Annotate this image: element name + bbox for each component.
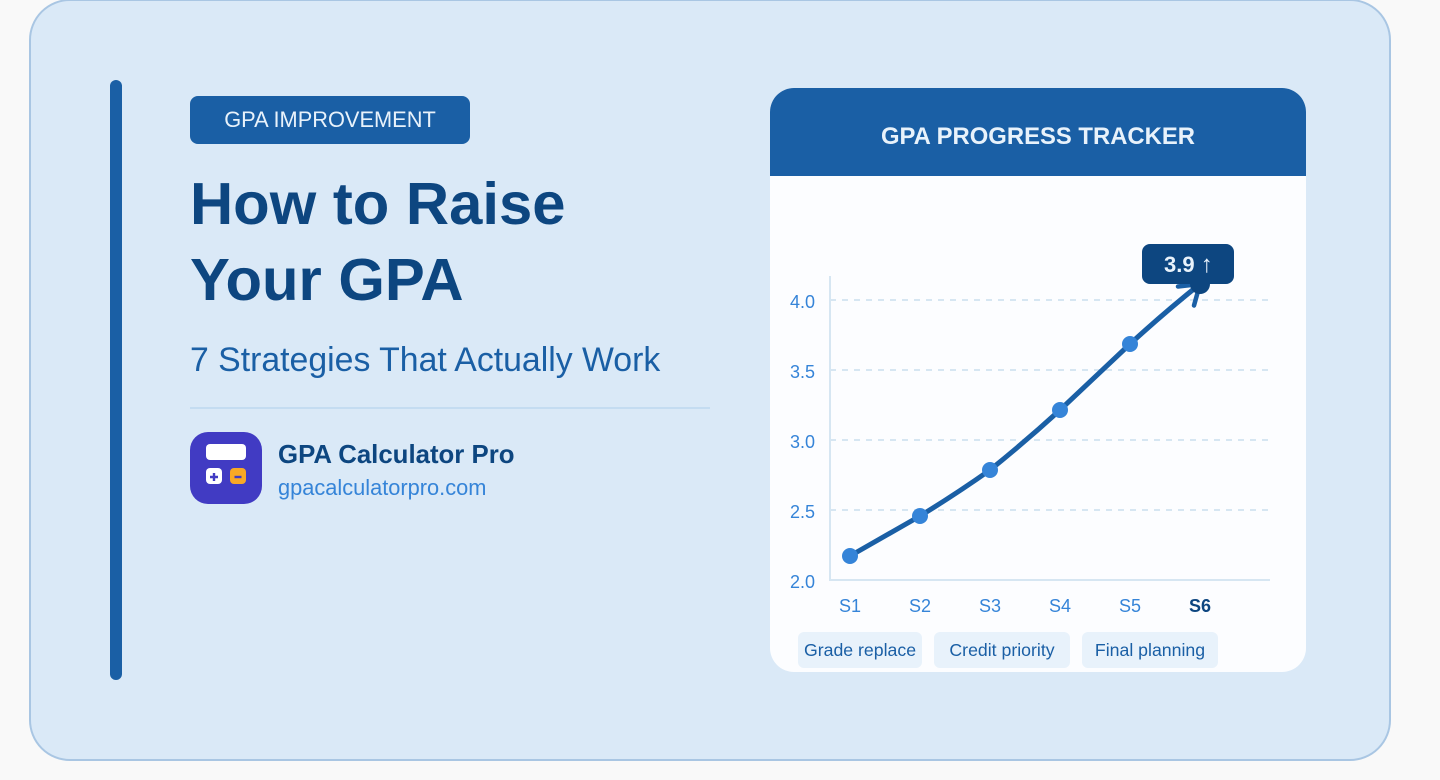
y axis labels: 4.0 [790, 292, 815, 312]
tag: credit priority: Credit priority [949, 640, 1055, 660]
x axis labels: S3 [979, 596, 1001, 616]
tag: credit priority [934, 632, 1070, 668]
title: How to Raise [190, 170, 565, 237]
subtitle: 7 Strategies That Actually Work [190, 341, 660, 379]
accent bar [110, 80, 122, 680]
tag: grade replace [798, 632, 922, 668]
brand name: GPA Calculator Pro [278, 441, 515, 469]
badge: GPA improvement: GPA IMPROVEMENT [224, 107, 436, 132]
x axis labels [839, 596, 1211, 616]
x axis labels: S2 [909, 596, 931, 616]
line chart [790, 244, 1270, 616]
panel: GPA progress tracker [770, 88, 1306, 672]
tag: final planning: Final planning [1095, 640, 1205, 660]
brand url: gpacalculatorpro.com [278, 475, 486, 500]
title: Your GPA [190, 246, 464, 313]
y axis labels: 3.0 [790, 432, 815, 452]
y axis labels: 3.5 [790, 362, 815, 382]
callout: 3.9 [1142, 244, 1234, 284]
panel header [770, 88, 1306, 176]
panel header: GPA PROGRESS TRACKER [881, 123, 1195, 150]
y axis labels: 2.0 [790, 572, 815, 592]
x axis labels: S1 [839, 596, 861, 616]
x axis labels: S4 [1049, 596, 1071, 616]
y axis labels: 2.5 [790, 502, 815, 522]
tag: final planning [1082, 632, 1218, 668]
badge: GPA improvement [190, 96, 470, 144]
tag: grade replace: Grade replace [804, 640, 916, 660]
divider [190, 407, 710, 409]
callout: 3.9: 3.9 ↑ [1164, 251, 1213, 278]
title [190, 170, 565, 313]
x axis labels: S5 [1119, 596, 1141, 616]
icon: calculator logo [190, 432, 262, 504]
x axis labels: S6 [1189, 596, 1211, 616]
y axis labels [790, 292, 815, 592]
data line [842, 274, 1210, 564]
